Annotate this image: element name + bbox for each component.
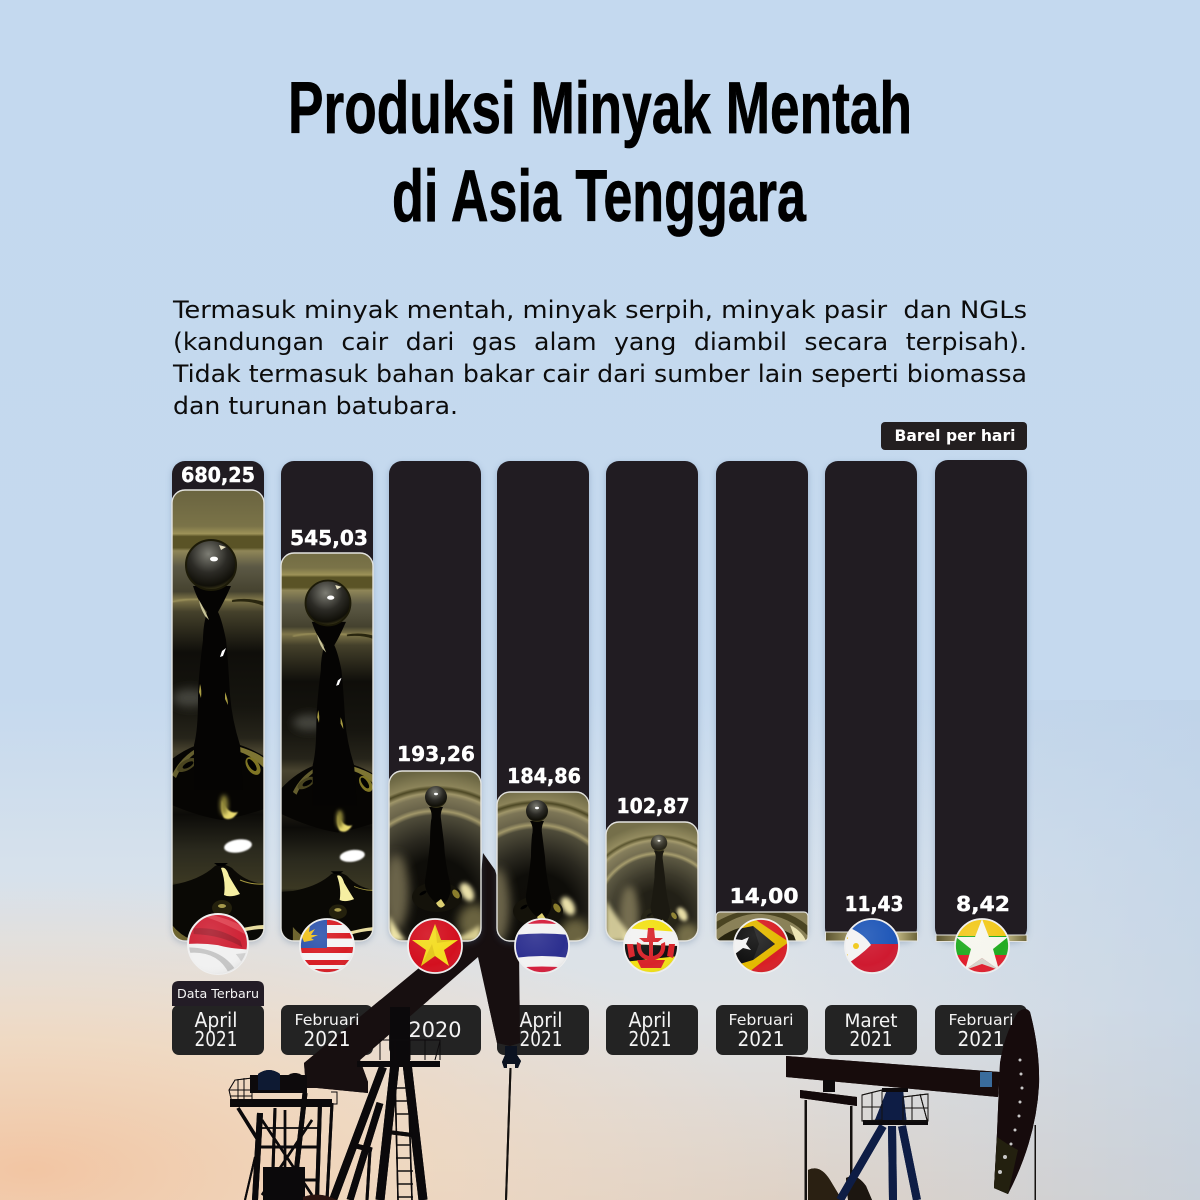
- date labels: Februari: [948, 1011, 1014, 1029]
- badge: data terbaru: [172, 981, 264, 1006]
- bar: Myanmar 8,42: 8,42: [956, 892, 1010, 916]
- description text block: (kandungan cair dari gas alam yang diambil secara terpisah).: [173, 328, 1027, 356]
- bar: Malaysia 545,03: [278, 460, 376, 946]
- date labels: 2021: [738, 1027, 784, 1051]
- date labels: [194, 1008, 1014, 1051]
- date labels: 2021: [194, 1027, 238, 1051]
- title: Produksi Minyak Mentah: [288, 68, 912, 149]
- bar: Malaysia 545,03: 545,03: [290, 526, 368, 550]
- date badge backgrounds: [172, 1005, 1027, 1055]
- date labels: April: [194, 1008, 238, 1032]
- flag: Myanmar: [954, 918, 1010, 975]
- bar: Filipina 11,43: 11,43: [844, 892, 904, 916]
- bar: Indonesia 680,25: [168, 460, 267, 946]
- bar: Timor-Leste 14,00: 14,00: [730, 884, 798, 908]
- description text block: Tidak termasuk bahan bakar cair dari sumber lain seperti biomassa: [172, 360, 1027, 388]
- bar: Brunei 102,87: 102,87: [616, 794, 690, 818]
- bar: Brunei 102,87: [606, 461, 712, 956]
- pump jacks over badges: [228, 1000, 1040, 1200]
- description text block: Termasuk minyak mentah, minyak serpih, minyak pasir dan NGLs: [172, 296, 1027, 324]
- flag: Philippines: [844, 918, 900, 974]
- flag: Malaysia: [299, 918, 355, 974]
- flag: Indonesia: [187, 913, 249, 975]
- left pump jack silhouette: [229, 853, 521, 1200]
- flag: Thailand: [514, 918, 570, 974]
- bar: Indonesia 680,25: 680,25: [181, 463, 255, 487]
- date labels: Februari: [728, 1011, 794, 1029]
- right pump jack silhouette: [786, 1009, 1039, 1200]
- bar: Thailand 184,86: 184,86: [507, 764, 581, 788]
- flag: Timor-Leste: [733, 918, 789, 974]
- title: [288, 68, 912, 237]
- unit badge: barel per hari: [881, 422, 1027, 450]
- date labels: Maret: [844, 1011, 898, 1032]
- bar: Vietnam 193,26: 193,26: [397, 742, 475, 766]
- badge: data terbaru: Data Terbaru: [177, 986, 259, 1001]
- date labels: 2021: [520, 1027, 562, 1051]
- date labels: 2021: [304, 1027, 350, 1051]
- bar: Timor-Leste 14,00: [716, 461, 808, 943]
- flag: Brunei: [623, 918, 679, 974]
- date labels: 2021: [958, 1027, 1004, 1051]
- flag: Vietnam: [407, 918, 463, 974]
- date labels: Februari: [294, 1011, 360, 1029]
- bar: Thailand 184,86: [494, 460, 592, 946]
- title: di Asia Tenggara: [392, 156, 807, 237]
- date labels: 2021: [628, 1027, 672, 1051]
- flag shading overlay: [188, 914, 1009, 974]
- bar: Vietnam 193,26: [386, 460, 484, 946]
- date labels: April: [520, 1008, 562, 1032]
- description text block: dan turunan batubara.: [173, 392, 458, 420]
- date labels: 2020: [408, 1018, 462, 1042]
- date labels: April: [628, 1008, 672, 1032]
- unit badge: barel per hari: Barel per hari: [894, 426, 1016, 445]
- date labels: 2021: [850, 1027, 892, 1051]
- description text block: [172, 296, 1027, 420]
- bar: Myanmar 8,42: [935, 460, 1027, 943]
- panel: bar chart: [168, 460, 1030, 946]
- bar: Filipina 11,43: [825, 461, 918, 943]
